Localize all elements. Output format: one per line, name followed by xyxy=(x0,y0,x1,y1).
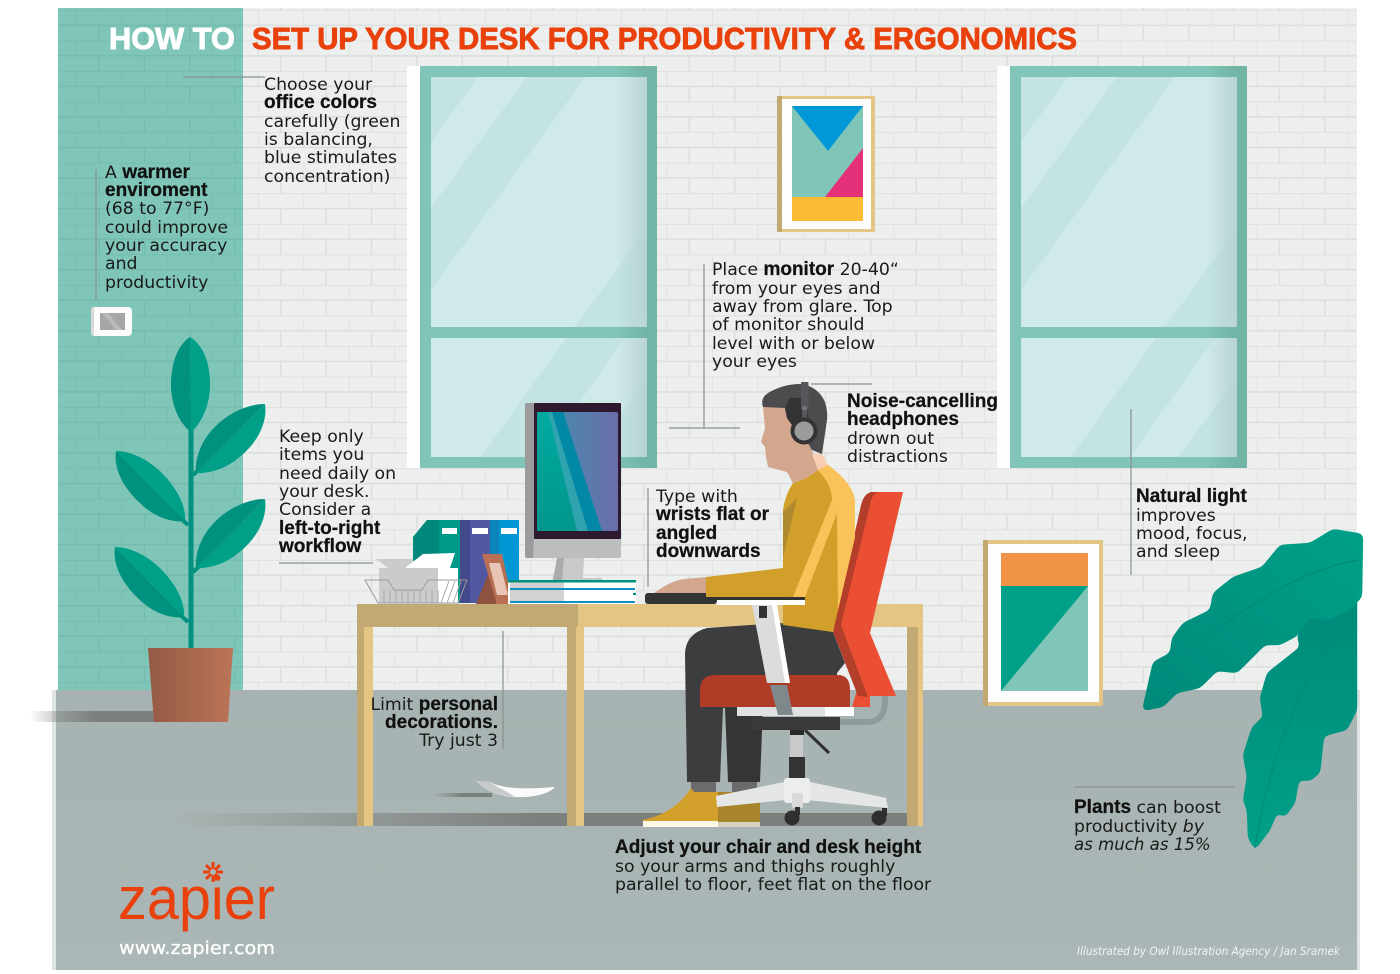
callout: plants: can boost xyxy=(1131,798,1221,818)
left window xyxy=(407,66,657,468)
armrest xyxy=(717,597,805,600)
headphones xyxy=(790,382,818,444)
hand xyxy=(654,577,706,597)
callout: natural light: improves xyxy=(1136,506,1216,526)
monitor xyxy=(525,403,621,580)
callout: keep items: your desk. xyxy=(279,482,369,502)
callout: personal decorations: decorations. xyxy=(385,712,498,733)
leaves xyxy=(115,337,265,617)
right window xyxy=(997,66,1247,468)
monitor screen xyxy=(537,412,618,531)
callout: wrists: Type with xyxy=(655,487,738,507)
callout: plants: productivity xyxy=(1074,817,1183,837)
callout: natural light xyxy=(1131,409,1248,575)
callout: personal decorations xyxy=(370,631,503,751)
callout: natural light: mood, focus, xyxy=(1136,524,1248,544)
callout: headphones xyxy=(811,384,998,467)
callout: monitor placement: your eyes xyxy=(712,352,797,372)
back leg xyxy=(725,707,763,782)
callout: headphones: Noise-cancelling xyxy=(847,391,998,412)
callout: warmer environment: your accuracy xyxy=(105,236,227,256)
zapier logo xyxy=(118,862,275,959)
callout: keep items xyxy=(278,427,396,563)
callout: wrists: wrists flat or xyxy=(655,504,770,525)
pot xyxy=(148,648,233,722)
callout: monitor placement: of monitor should xyxy=(712,315,865,335)
callout: wrists: downwards xyxy=(656,541,761,562)
callout: headphones: drown out xyxy=(847,429,934,449)
callout: keep items: left-to-right xyxy=(279,518,381,539)
front leg and thigh xyxy=(685,623,845,782)
callout: warmer environment: and xyxy=(105,254,138,274)
upper leaf xyxy=(1142,529,1363,711)
title: HOW TO xyxy=(109,21,235,56)
seat xyxy=(700,675,850,707)
callout: plants: by xyxy=(1183,817,1205,837)
callout: personal decorations: Limit xyxy=(370,695,419,715)
callout: warmer environment: (68 to 77°F) xyxy=(105,199,209,219)
callout: office colors: office colors xyxy=(264,92,377,113)
photo frame xyxy=(476,554,513,604)
back shoe xyxy=(718,792,760,822)
front shoe xyxy=(643,788,718,822)
callout: personal decorations: Try just 3 xyxy=(418,731,498,751)
callout: keep items: workflow xyxy=(278,536,362,557)
callout: warmer environment: enviroment xyxy=(105,180,208,201)
illustration credit: Illustrated by Owl Illustration Agency / Jan Sramek xyxy=(1077,944,1341,958)
corner plant xyxy=(1142,529,1363,850)
callout: warmer environment: A xyxy=(105,163,122,183)
callout: keep items: Keep only xyxy=(279,427,364,447)
keyboard xyxy=(645,593,717,604)
callout: wrists xyxy=(648,487,770,587)
callout: plants: as much as 15% xyxy=(1074,835,1211,854)
callout: natural light: Natural light xyxy=(1136,486,1248,507)
paper on floor xyxy=(432,781,555,797)
callout: office colors: is balancing, xyxy=(264,130,373,150)
callout: monitor placement: level with or below xyxy=(712,334,875,354)
green accent wall xyxy=(58,8,243,690)
callout: chair and desk height: Adjust your chair and desk height xyxy=(615,837,922,858)
lower leaf xyxy=(1243,596,1357,850)
callout: warmer environment xyxy=(96,162,228,300)
callout: monitor placement: monitor 20-40“ xyxy=(763,259,899,280)
callout: warmer environment: warmer xyxy=(121,162,191,183)
zapier logo: www.zapier.com xyxy=(119,939,275,959)
callout: headphones: headphones xyxy=(847,409,959,430)
callout: office colors: Choose your xyxy=(264,75,373,95)
framed wall art xyxy=(777,96,875,232)
paper tray xyxy=(365,553,467,603)
arm xyxy=(706,568,793,597)
callout: chair and desk height: so your arms and thighs roughly xyxy=(615,857,895,877)
callout: chair and desk height: parallel to floor, feet flat on the floor xyxy=(615,875,932,895)
callout: warmer environment: productivity xyxy=(105,273,208,293)
callout: office colors: concentration) xyxy=(264,167,390,187)
callout: monitor placement: from your eyes and xyxy=(712,279,881,299)
chair base xyxy=(716,730,888,826)
callout: office colors: carefully (green xyxy=(264,112,400,132)
floor shadow under desk xyxy=(170,813,907,826)
framed floor art xyxy=(983,540,1103,706)
callout: office colors: blue stimulates xyxy=(264,148,397,168)
stack of books xyxy=(508,580,636,604)
desk xyxy=(357,604,923,826)
title: SET UP YOUR DESK FOR PRODUCTIVITY & ERGONOMICS xyxy=(252,21,1077,56)
floor xyxy=(52,690,1360,970)
callout: monitor placement: away from glare. Top xyxy=(712,297,893,317)
callout: plants: Plants xyxy=(1074,797,1131,818)
binders xyxy=(413,520,519,603)
callout: plants xyxy=(1074,787,1235,854)
chair back xyxy=(833,492,903,707)
torso xyxy=(783,465,855,632)
callout: wrists: angled xyxy=(656,523,717,544)
callout: monitor placement: Place xyxy=(712,260,763,280)
callout: personal decorations: personal xyxy=(419,694,498,715)
callout: monitor placement xyxy=(669,259,899,428)
callout: keep items: items you xyxy=(279,445,364,465)
potted plant xyxy=(30,337,265,722)
callout: natural light: and sleep xyxy=(1136,542,1220,562)
callout: warmer environment: could improve xyxy=(105,218,228,238)
person and office chair xyxy=(643,382,903,827)
brick wall xyxy=(58,8,1357,690)
callout: office colors xyxy=(183,75,400,187)
thermostat xyxy=(91,307,132,336)
callout: headphones: distractions xyxy=(847,447,948,467)
callout: keep items: need daily on xyxy=(279,464,396,484)
callout: keep items: Consider a xyxy=(279,500,371,520)
icon: asterisk xyxy=(203,862,223,882)
zapier logo: zapier xyxy=(118,865,275,932)
chair mechanism xyxy=(823,692,885,722)
head and neck xyxy=(761,405,818,483)
